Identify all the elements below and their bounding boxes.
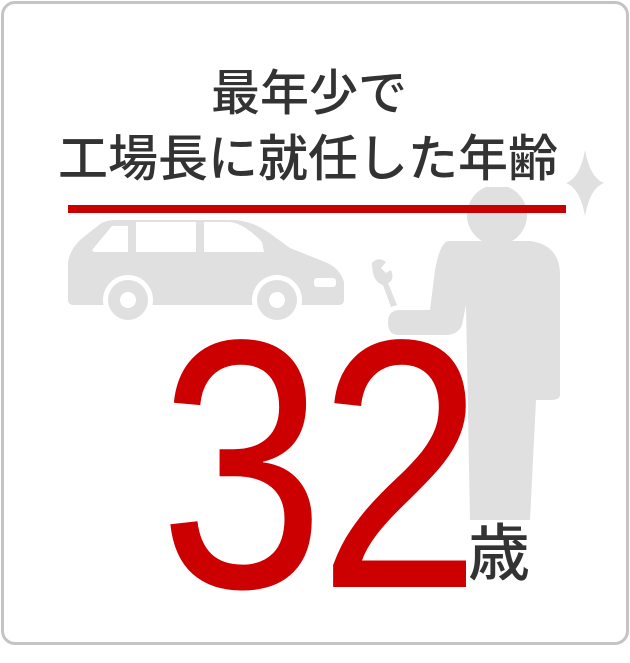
- number 32: 32: [159, 267, 477, 663]
- icon: sparkle: [566, 150, 604, 216]
- unit 歳: 歳: [468, 520, 530, 589]
- icon: worker: [372, 150, 604, 530]
- icon: car: [68, 220, 344, 325]
- text: 工場長に就任した年齢: [58, 131, 558, 187]
- title: 最年少で: [211, 67, 407, 121]
- red underline: [68, 205, 566, 213]
